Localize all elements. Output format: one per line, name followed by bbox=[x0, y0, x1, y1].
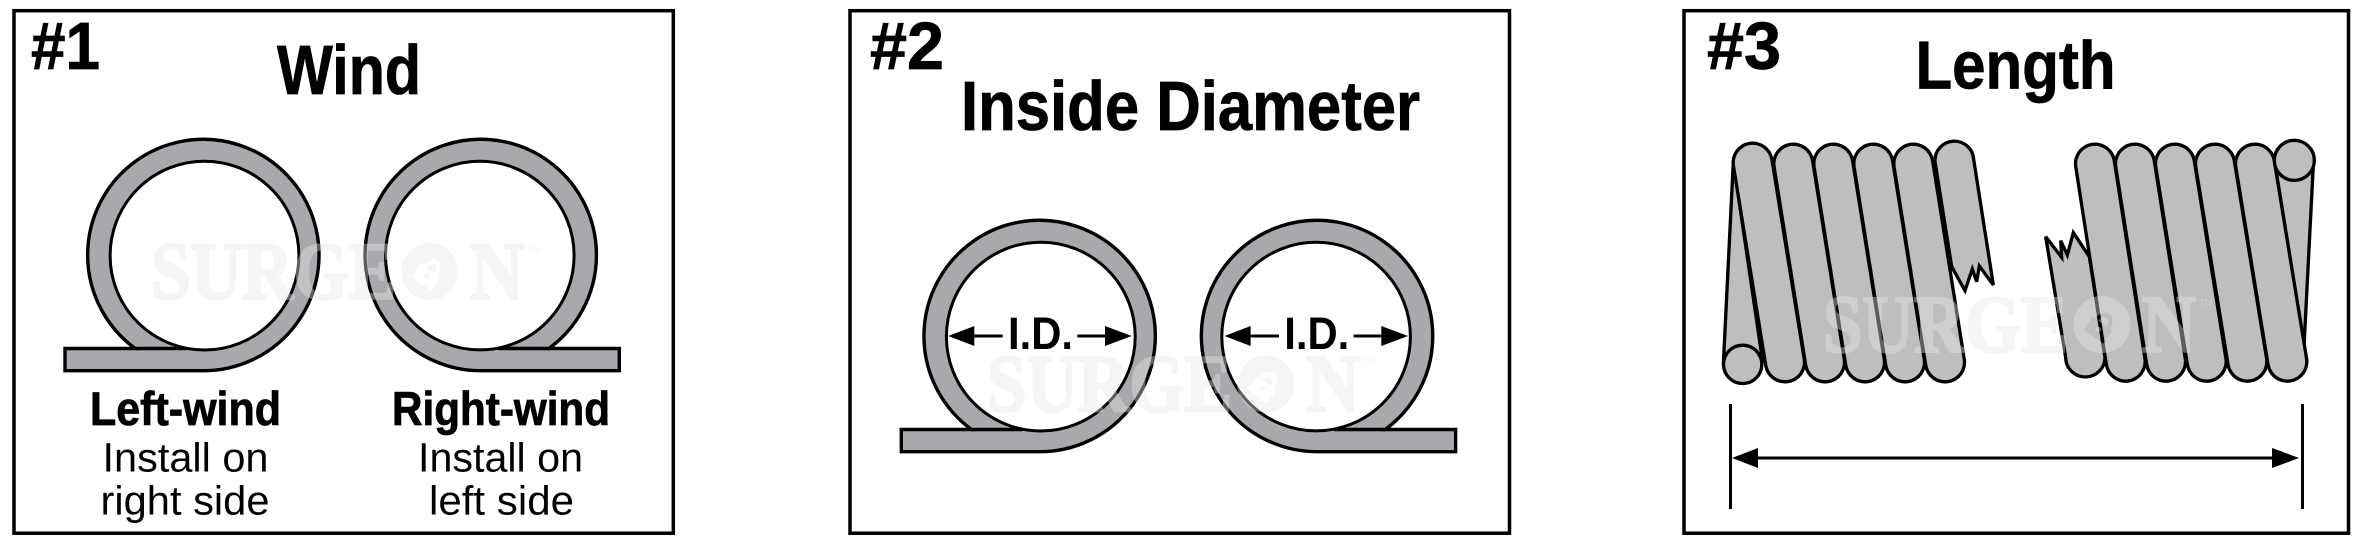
label: right-wind: left side bbox=[429, 478, 574, 524]
label: right-wind bbox=[392, 382, 610, 524]
watermark: panel 3: N bbox=[2142, 278, 2196, 370]
watermark: panel 3: TM bbox=[2199, 298, 2212, 308]
panel number 1: #1 bbox=[31, 9, 100, 84]
watermark: panel 1: TM bbox=[527, 244, 540, 254]
dimension: left I.D. bbox=[948, 308, 1132, 359]
illustration: left coil section bbox=[1723, 141, 1993, 383]
icon: right spring ring bbox=[1201, 220, 1456, 452]
label: right-wind: Right-wind bbox=[392, 382, 610, 435]
watermark: panel 1: N bbox=[470, 226, 524, 316]
watermark: panel 1: SURGE bbox=[151, 226, 396, 316]
panel number 2: #2 bbox=[870, 9, 944, 84]
dimension: left I.D.: I.D. bbox=[1008, 308, 1073, 359]
label: left-wind: right side bbox=[100, 478, 270, 524]
heading: inside diameter: Inside Diameter bbox=[961, 67, 1420, 145]
panel number 3: #3 bbox=[1707, 9, 1781, 84]
icon: right-wind spring ring bbox=[365, 139, 619, 371]
watermark: panel 3: SURGE bbox=[1823, 278, 2068, 370]
dimension: right I.D.: I.D. bbox=[1284, 308, 1349, 359]
panel: inside diameter bbox=[850, 9, 1510, 533]
label: left-wind: Install on bbox=[102, 434, 268, 480]
dimension: right I.D. bbox=[1225, 308, 1408, 359]
watermark: panel 2: TM bbox=[1363, 357, 1376, 367]
panel: length bbox=[1684, 9, 2348, 533]
label: left-wind: Left-wind bbox=[90, 382, 281, 435]
heading: wind: Wind bbox=[277, 31, 421, 109]
dimension: length arrow bbox=[1730, 404, 2302, 509]
heading: length: Length bbox=[1916, 28, 2116, 104]
panel: wind bbox=[14, 9, 673, 533]
label: right-wind: Install on bbox=[418, 434, 583, 480]
watermark: panel 2: SURGE bbox=[987, 338, 1232, 429]
label: left-wind bbox=[90, 382, 281, 524]
icon: left-wind spring ring bbox=[65, 139, 319, 371]
illustration: right coil section bbox=[2046, 140, 2314, 377]
watermark: panel 2: N bbox=[1306, 338, 1360, 429]
icon: left spring ring bbox=[901, 220, 1155, 452]
